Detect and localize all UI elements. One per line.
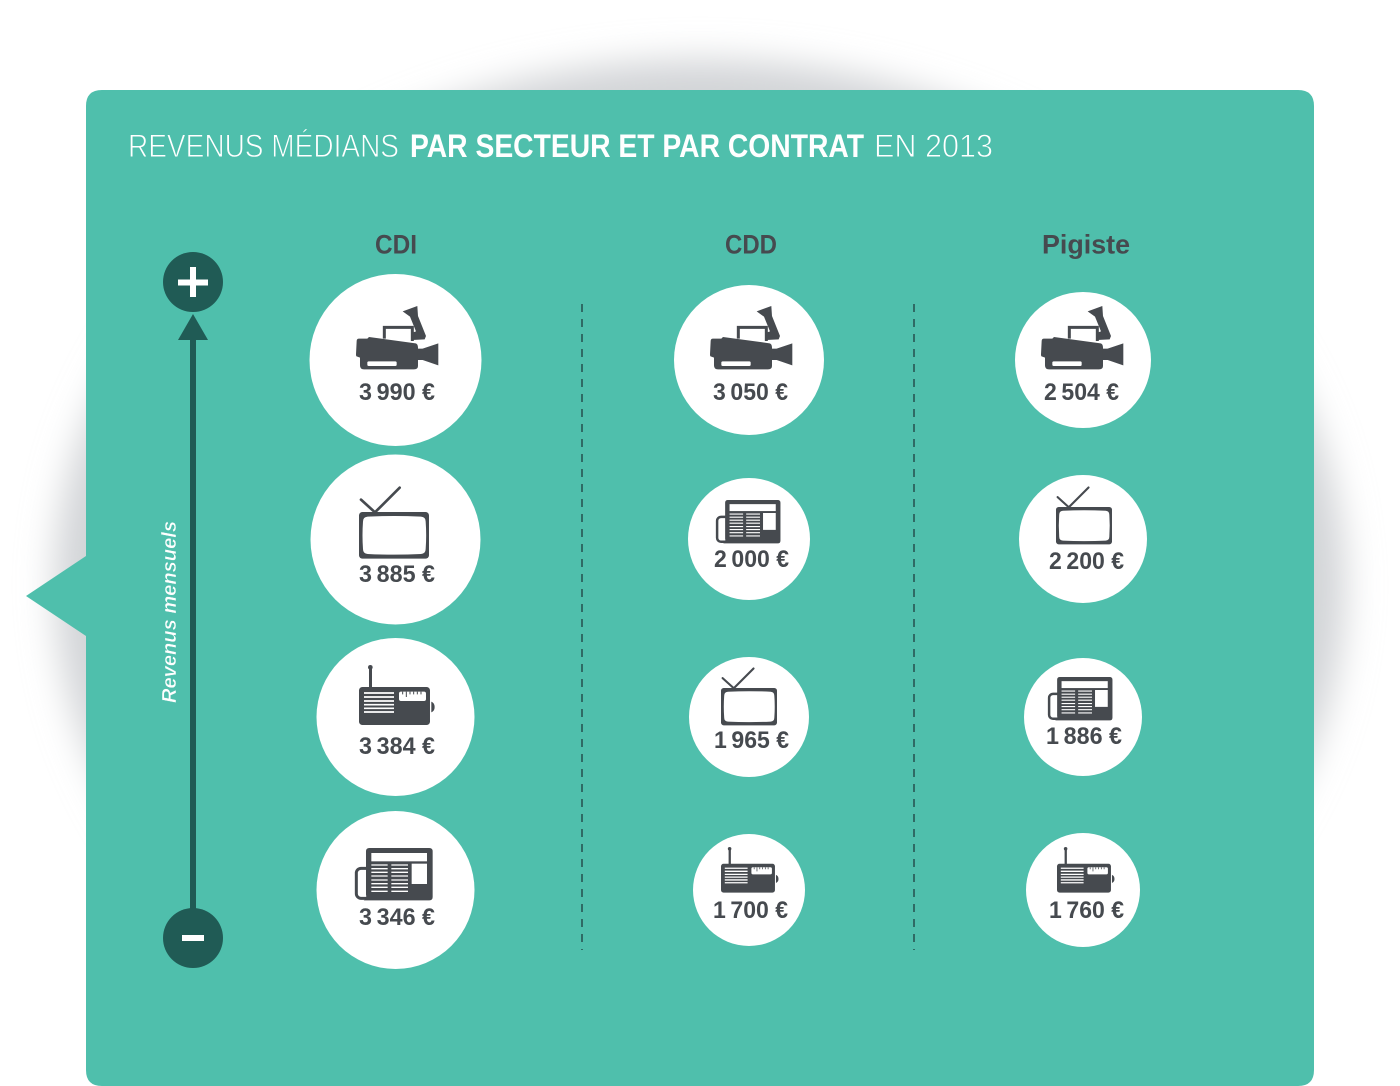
- Pigiste: television 2200: [1019, 475, 1147, 603]
- CDI: radio 3384: 3 384 €: [359, 733, 435, 760]
- title: [128, 128, 993, 164]
- column heading: Pigiste: Pigiste: [1042, 230, 1130, 260]
- axis label: Revenus mensuels: [159, 521, 181, 703]
- CDD: radio 1700: [693, 834, 805, 946]
- CDI: camera 3990: [310, 274, 482, 446]
- Pigiste: newspaper 1886: [1024, 658, 1142, 776]
- icon: minus: [163, 908, 223, 968]
- CDI: camera 3990: 3 990 €: [359, 379, 435, 406]
- title: EN 2013: [874, 128, 993, 164]
- title: REVENUS MÉDIANS: [128, 128, 399, 164]
- CDI: newspaper 3346: 3 346 €: [359, 904, 435, 931]
- CDD: radio 1700: 1 700 €: [713, 897, 788, 924]
- Pigiste: radio 1760: 1 760 €: [1049, 897, 1124, 924]
- column heading: CDI: CDI: [375, 230, 417, 260]
- Pigiste: newspaper 1886: 1 886 €: [1046, 723, 1122, 750]
- revenue axis: [159, 252, 223, 968]
- CDD: television 1965: 1 965 €: [714, 727, 789, 754]
- column heading: CDD: CDD: [725, 230, 777, 260]
- CDD: television 1965: [689, 657, 809, 777]
- icon: plus: [163, 252, 223, 312]
- axis arrow: [178, 314, 208, 913]
- title: PAR SECTEUR ET PAR CONTRAT: [410, 128, 864, 164]
- CDD: camera 3050: [674, 285, 824, 435]
- Pigiste: radio 1760: [1026, 833, 1140, 947]
- CDD: newspaper 2000: [688, 478, 810, 600]
- Pigiste: camera 2504: [1015, 292, 1151, 428]
- CDI: television 3885: [310, 454, 480, 624]
- Pigiste: camera 2504: 2 504 €: [1044, 379, 1119, 406]
- CDI: radio 3384: [316, 638, 474, 796]
- CDD: newspaper 2000: 2 000 €: [714, 546, 789, 573]
- CDI: television 3885: 3 885 €: [359, 561, 435, 588]
- CDD: camera 3050: 3 050 €: [713, 379, 788, 406]
- Pigiste: television 2200: 2 200 €: [1049, 548, 1124, 575]
- CDI: newspaper 3346: [316, 811, 474, 969]
